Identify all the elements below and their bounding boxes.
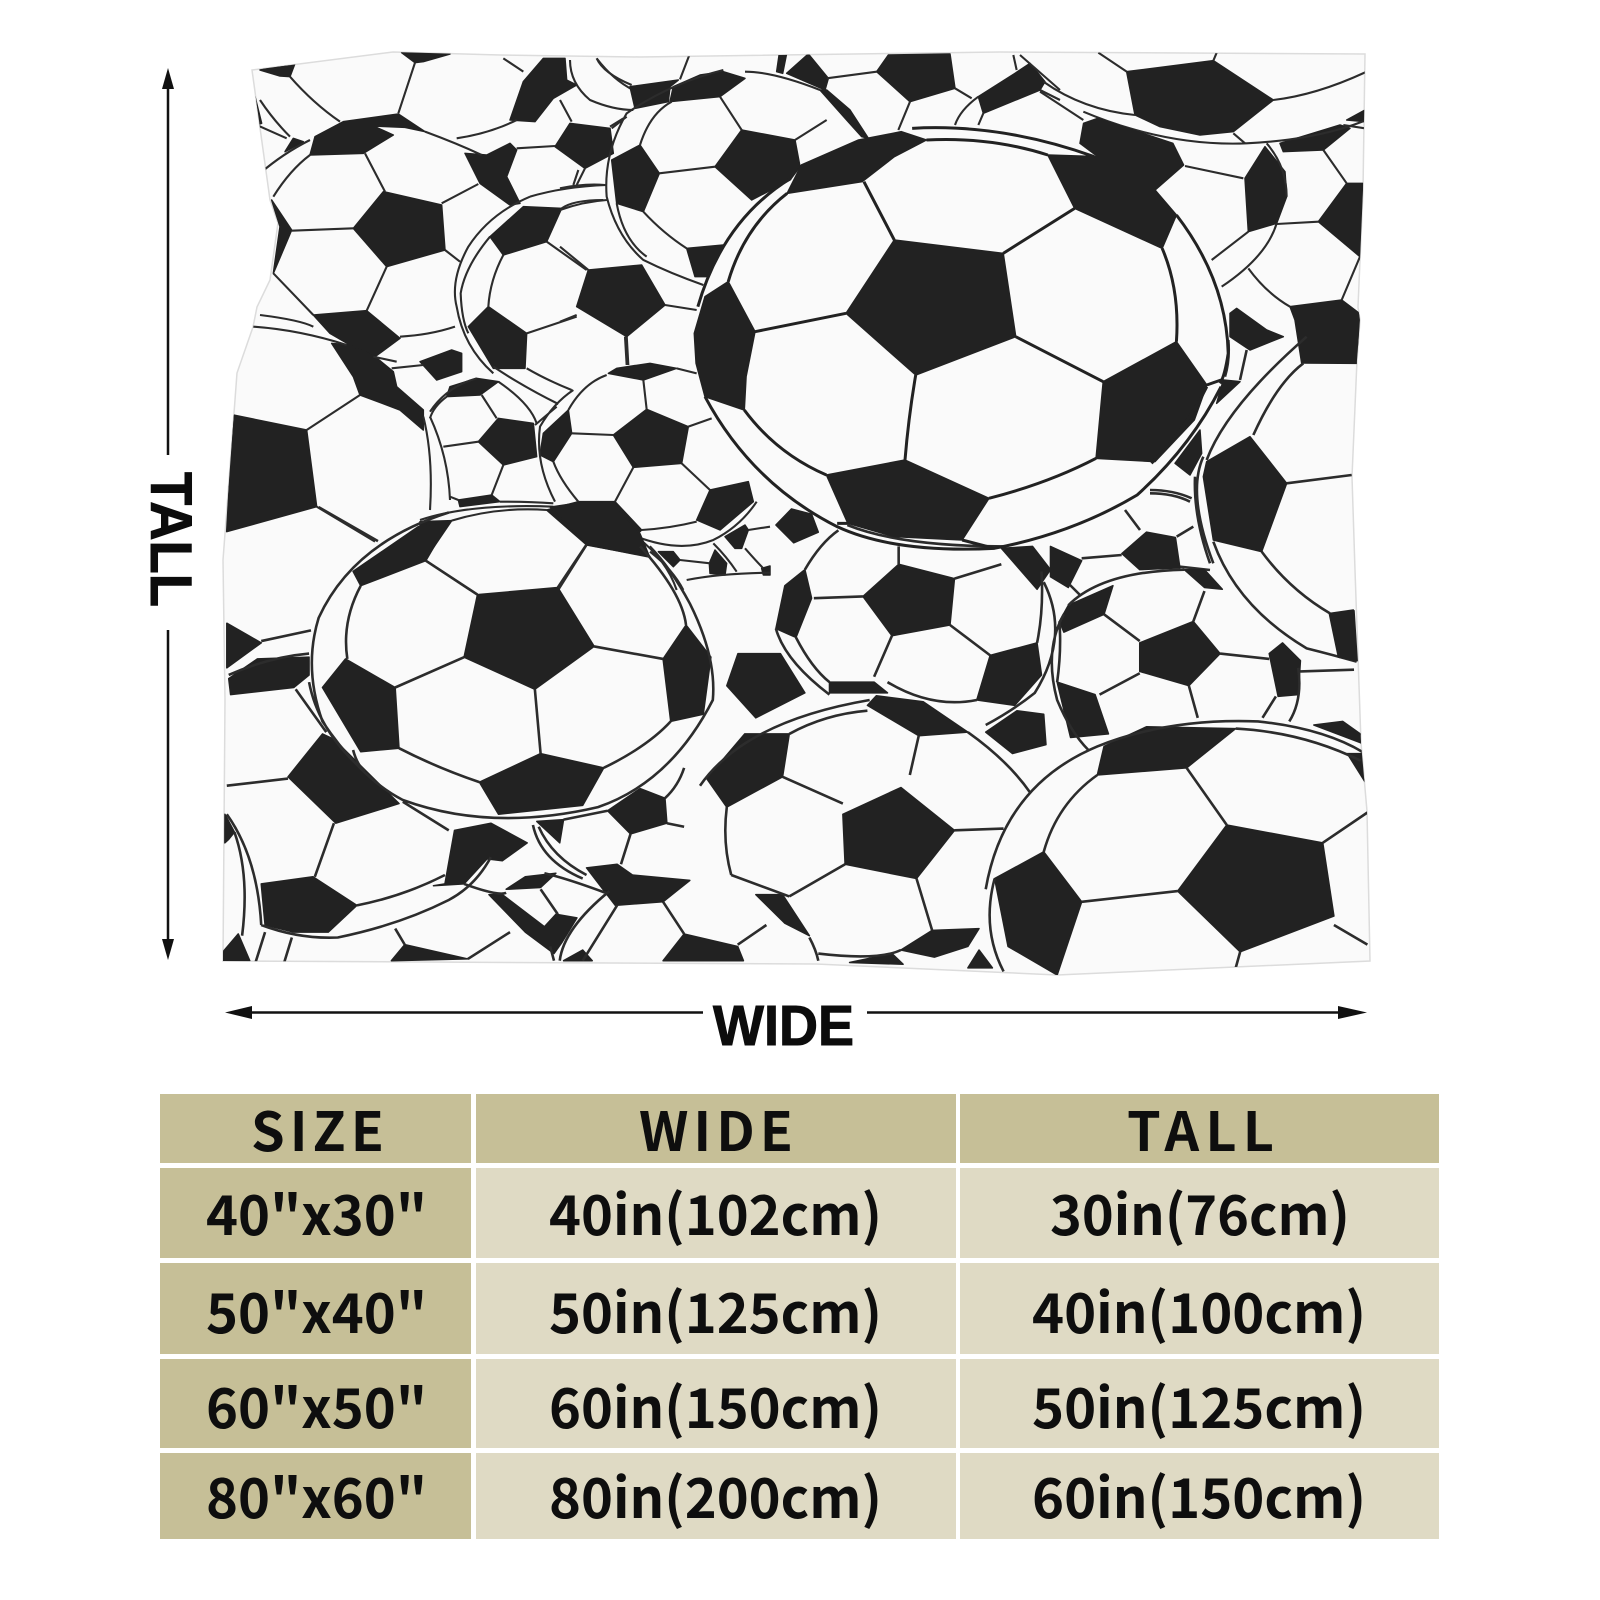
label: tall: TALL: [138, 472, 203, 607]
top middle soccer balls: [560, 53, 1060, 340]
row: 60x50: 50in(125cm): [1032, 1364, 1366, 1444]
row: 50x40: 50in(125cm): [549, 1269, 882, 1349]
table header row: TALL: [1127, 1088, 1274, 1167]
table header row: SIZE: [251, 1088, 384, 1167]
size table: [160, 1088, 1439, 1539]
row: 40x30: 30in(76cm): [1050, 1171, 1350, 1251]
row: 50x40: 50"x40": [206, 1269, 427, 1349]
arrow: tall downward: [162, 630, 174, 960]
row: 40x30: 40"x30": [206, 1171, 427, 1251]
large central soccer ball: [694, 118, 1228, 549]
row: 60x50: 60"x50": [206, 1364, 427, 1444]
central left soccer balls: [420, 337, 770, 590]
right edge soccer ball: [1070, 337, 1357, 662]
table header row: [160, 1088, 1439, 1167]
row: 80x60: 80"x60": [206, 1454, 427, 1534]
arrow: wide leftward: [225, 1006, 703, 1019]
lower middle and right soccer balls: [700, 509, 1367, 975]
row: 40x30: [160, 1168, 1439, 1258]
row: 80x60: 80in(200cm): [549, 1454, 882, 1534]
arrow: tall upward: [162, 68, 174, 455]
row: 80x60: [160, 1453, 1439, 1539]
row: 60x50: [160, 1359, 1439, 1448]
blanket with soccer ball pattern: [223, 52, 1370, 975]
lower left soccer balls: [223, 502, 766, 962]
row: 40x30: 40in(102cm): [549, 1171, 882, 1251]
upper left soccer balls: [227, 53, 633, 542]
row: 60x50: 60in(150cm): [549, 1364, 882, 1444]
label: wide: WIDE: [713, 994, 854, 1058]
row: 50x40: [160, 1263, 1439, 1354]
table header row: WIDE: [639, 1088, 793, 1167]
row: 80x60: 60in(150cm): [1032, 1454, 1366, 1534]
row: 50x40: 40in(100cm): [1032, 1269, 1366, 1349]
top right soccer balls: [1040, 53, 1367, 363]
arrow: wide rightward: [867, 1006, 1367, 1019]
